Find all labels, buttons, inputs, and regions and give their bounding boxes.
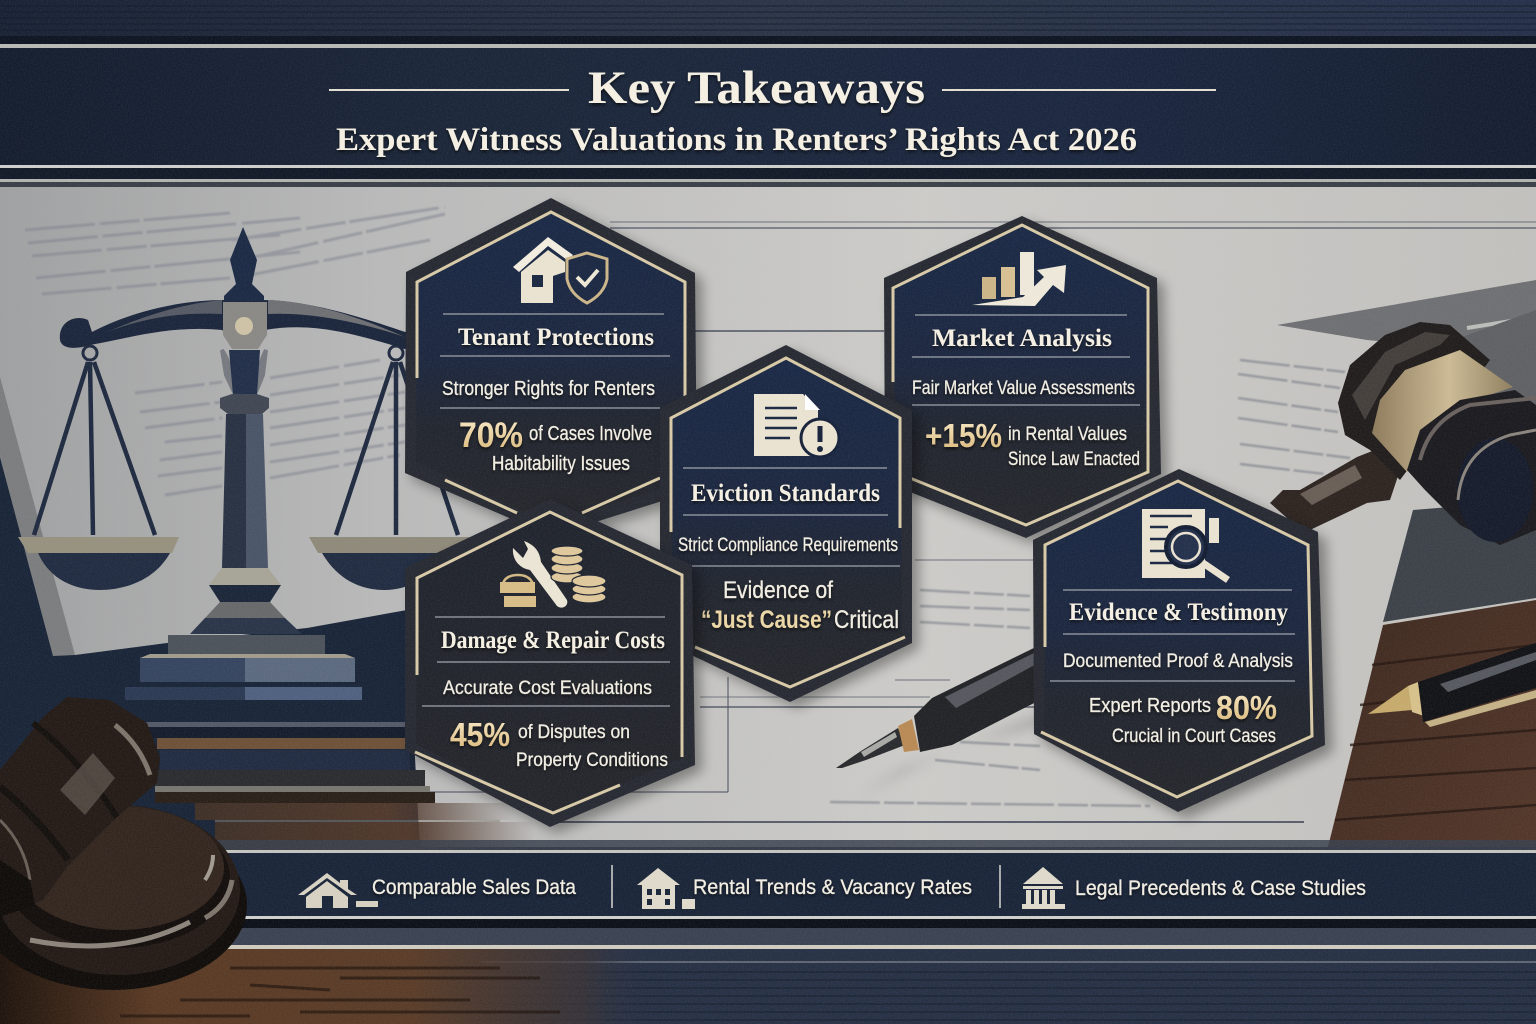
faint ruled lines behind cards bbox=[420, 222, 1536, 822]
card heading: Eviction Standards bbox=[691, 480, 880, 507]
icon: townhouse bbox=[637, 868, 695, 909]
right pan chains bbox=[336, 362, 458, 535]
card: Evidence and Testimony bbox=[1033, 469, 1333, 819]
footer label: Legal Precedents & Case Studies bbox=[1075, 877, 1366, 900]
stat text bbox=[492, 423, 652, 475]
gavel head bbox=[0, 697, 160, 917]
paper background bbox=[0, 187, 1536, 847]
document text lines, right sheet bbox=[830, 360, 1350, 806]
gavel, lower left bbox=[0, 697, 247, 990]
subheading: Accurate Cost Evaluations bbox=[443, 678, 652, 699]
pen, right bbox=[1368, 643, 1536, 727]
stat text: of Disputes on bbox=[518, 722, 630, 743]
icon: document with alert bbox=[754, 394, 839, 457]
wrench bbox=[513, 541, 567, 608]
card heading: Evidence & Testimony bbox=[1069, 599, 1288, 626]
dividers bbox=[680, 468, 900, 566]
icon: courthouse bbox=[1022, 867, 1065, 909]
icon: house bbox=[298, 873, 378, 908]
card: Eviction Standards bbox=[660, 345, 919, 708]
stat text: Property Conditions bbox=[516, 750, 668, 771]
gold border bbox=[417, 212, 685, 513]
stat text: Evidence of bbox=[723, 577, 833, 604]
gold border bbox=[671, 358, 905, 687]
stat: 45%: 45% bbox=[450, 716, 510, 753]
stat text: Habitability Issues bbox=[492, 453, 630, 475]
head bbox=[1338, 322, 1536, 545]
pen, centre bbox=[836, 645, 1040, 795]
document text lines, left sheet bbox=[25, 207, 445, 495]
base steps bbox=[209, 568, 281, 585]
subtitle: Expert Witness Valuations in Renters’ Rights Act 2026 bbox=[336, 122, 1137, 158]
stepped plinth and wood strips, left bbox=[145, 722, 535, 850]
gold border bbox=[1041, 481, 1312, 797]
subheading: Fair Market Value Assessments bbox=[912, 378, 1135, 399]
dividers bbox=[912, 315, 1140, 405]
title rules bbox=[329, 89, 1216, 91]
right pan bbox=[309, 537, 470, 590]
gavel, right bbox=[1270, 322, 1536, 545]
stat: 70%: 70% bbox=[459, 416, 523, 455]
stat: 80%: 80% bbox=[1216, 689, 1277, 726]
sound block bbox=[0, 805, 247, 990]
subheading: Documented Proof & Analysis bbox=[1063, 651, 1293, 672]
hexagon plate bbox=[405, 499, 695, 827]
icon: tools and coins bbox=[500, 541, 606, 608]
finial bbox=[224, 227, 264, 301]
dividers bbox=[440, 314, 670, 408]
stat text: of Cases Involve bbox=[529, 423, 652, 445]
icon: house and shield bbox=[513, 237, 607, 303]
footer label: Rental Trends & Vacancy Rates bbox=[693, 876, 972, 899]
stat text: in Rental Values bbox=[1008, 424, 1127, 445]
subheading: Stronger Rights for Renters bbox=[442, 378, 655, 400]
stat text: Critical bbox=[834, 606, 899, 634]
column bbox=[229, 350, 260, 395]
hexagon plate bbox=[1033, 469, 1325, 812]
icon: rising chart bbox=[972, 252, 1066, 306]
stat text: Expert Reports bbox=[1089, 695, 1211, 717]
stat text bbox=[1008, 424, 1140, 470]
stat: +15%: +15% bbox=[925, 417, 1002, 454]
stat text: “Just Cause” bbox=[701, 606, 832, 634]
gold border bbox=[415, 512, 682, 813]
coins bbox=[551, 546, 606, 603]
card: Market Analysis bbox=[884, 216, 1168, 544]
dividers bbox=[422, 617, 670, 706]
title text: Key Takeaways bbox=[588, 62, 925, 114]
stat caption: Crucial in Court Cases bbox=[1112, 726, 1276, 747]
card heading: Damage & Repair Costs bbox=[441, 627, 665, 654]
subheading: Strict Compliance Requirements bbox=[678, 535, 898, 556]
beam bbox=[60, 300, 422, 350]
hexagon plate bbox=[884, 216, 1161, 538]
toolbox bbox=[500, 575, 536, 607]
dividers bbox=[1050, 590, 1295, 681]
right desk: folder and wood bbox=[1277, 280, 1536, 847]
card: Damage and Repair Costs bbox=[405, 499, 702, 833]
hexagon plate bbox=[405, 198, 697, 536]
centre block bbox=[223, 302, 267, 349]
top header band bbox=[0, 0, 1536, 187]
left pan bbox=[18, 537, 179, 590]
left pan chains bbox=[34, 362, 155, 535]
icon: document with magnifier bbox=[1142, 509, 1228, 580]
stat text bbox=[516, 722, 668, 771]
card: Tenant Protections bbox=[405, 198, 704, 542]
gold border bbox=[893, 225, 1148, 525]
scales of justice bbox=[18, 227, 470, 700]
hexagon plate bbox=[660, 345, 912, 702]
footer band bbox=[0, 840, 1536, 1024]
stat text: Since Law Enacted bbox=[1008, 449, 1140, 470]
handle bbox=[1270, 448, 1400, 530]
card heading: Tenant Protections bbox=[458, 324, 654, 351]
left navy desk and back sheet bbox=[0, 377, 420, 850]
card heading: Market Analysis bbox=[932, 325, 1112, 352]
footer dividers bbox=[612, 865, 1000, 908]
stat text bbox=[701, 577, 899, 634]
footer label: Comparable Sales Data bbox=[372, 876, 576, 899]
